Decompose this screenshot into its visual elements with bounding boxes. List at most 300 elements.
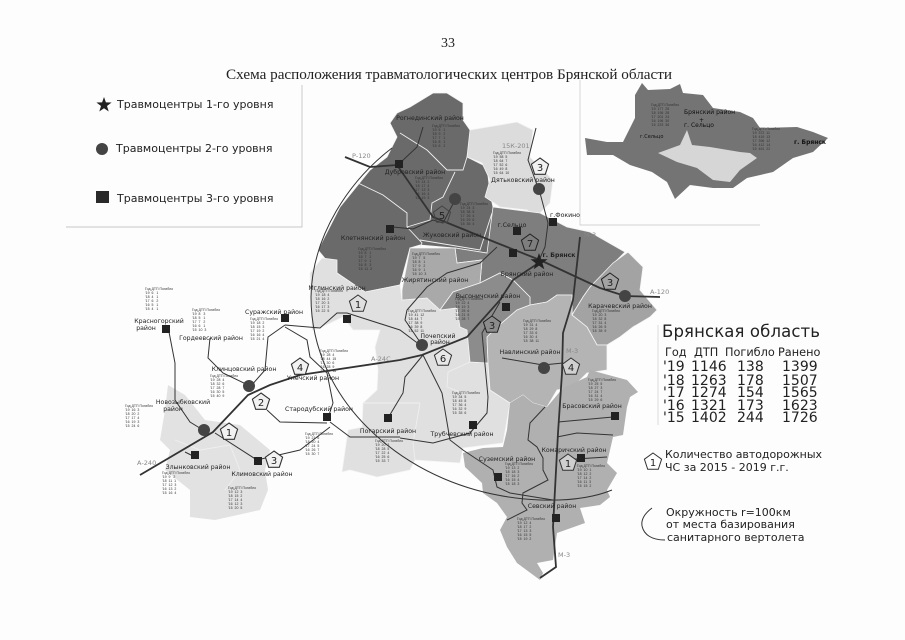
district accident tables (tiny, approximate figures): '15 35 9 (592, 329, 606, 333)
road labels: А-120 (650, 288, 669, 296)
district accident tables (tiny, approximate figures): '16 21 5 (455, 313, 469, 317)
legend: helicopter circle meaning (642, 506, 805, 544)
main road A-240 (140, 262, 540, 475)
region: Zhiryatino district (402, 248, 482, 310)
district accident tables (tiny, approximate figures): '16 31 4 (588, 394, 602, 398)
region: Karachev district (572, 252, 657, 345)
district accident tables (tiny, approximate figures): '15 10 3 (192, 328, 206, 332)
district accident tables (tiny, approximate figures): '19 12 3 (228, 490, 242, 494)
district labels: г.Фокино (550, 212, 580, 219)
table header row: Ранено (778, 346, 820, 359)
district accident tables (tiny, approximate figures): '18 32 6 (210, 382, 224, 386)
district accident tables (tiny, approximate figures): '17 6 2 (145, 299, 158, 303)
district labels: Навлинский район (500, 348, 560, 356)
district accident tables (tiny, approximate figures): '19 18 2 (250, 321, 264, 325)
district labels: Красногорский (134, 317, 184, 325)
district labels: Брянский район (501, 270, 553, 278)
district accident tables (tiny, approximate figures): '19 7 5 (412, 256, 425, 260)
district accident tables (tiny, approximate figures): '15 19 2 (517, 537, 531, 541)
district accident tables (tiny, approximate figures): '16 12 3 (228, 502, 242, 506)
district accident tables (tiny, approximate figures): Год ДТП Погибло (210, 374, 238, 378)
district accident tables (tiny, approximate figures): Год ДТП Погибло (505, 462, 533, 466)
district accident tables (tiny, approximate figures): '15 38 11 (523, 339, 539, 343)
legend text level 2: Травмоцентры 2-го уровня (115, 142, 272, 155)
district accident tables (tiny, approximate figures): Год ДТП Погибло (358, 247, 386, 251)
panel: inset map of Bryansk district (580, 80, 828, 225)
icon: square level 3 (96, 191, 109, 203)
district accident tables (tiny, approximate figures): '15 44 16 (320, 369, 336, 373)
row 2016: '16 (663, 398, 685, 414)
row 2019: 138 (737, 359, 764, 375)
district labels: Клинцовский район (212, 365, 276, 373)
emergency count pentagons: 7 (527, 239, 533, 250)
table header row (665, 346, 820, 359)
district labels: Трубчевский район (429, 430, 494, 438)
district accident tables (tiny, approximate figures): '17 24 7 (588, 390, 602, 394)
inset table: Bryansk city: '16 412 14 (752, 143, 770, 147)
road labels: Р-120 (352, 152, 371, 160)
district labels: Клетнянский район (341, 234, 405, 242)
district accident tables (tiny, approximate figures): '17 26 4 (460, 214, 474, 218)
district accident tables (tiny, approximate figures): '17 12 3 (162, 483, 176, 487)
table heading: Брянская область (662, 322, 820, 341)
district labels: Погарский район (360, 427, 416, 435)
table header row: Погибло (725, 346, 775, 359)
row 2018: 1507 (782, 373, 818, 389)
row 2016: 1321 (691, 398, 727, 414)
district accident tables (tiny, approximate figures): '18 15 3 (250, 325, 264, 329)
row 2017: 154 (737, 385, 764, 401)
district accident tables (tiny, approximate figures): Год ДТП Погибло (192, 308, 220, 312)
district accident tables (tiny, approximate figures): '19 34 5 (452, 395, 466, 399)
district accident tables (tiny, approximate figures): '16 25 6 (375, 455, 389, 459)
district labels: Жуковский район (423, 231, 481, 239)
district accident tables (tiny, approximate figures): Год ДТП Погибло (415, 176, 443, 180)
row 2019: 1146 (691, 359, 727, 375)
district accident tables (tiny, approximate figures): '15 4 1 (145, 307, 158, 311)
district accident tables (tiny, approximate figures): '16 17 3 (315, 305, 329, 309)
district labels: Климовский район (231, 470, 293, 478)
district accident tables (tiny, approximate figures): '16 30 4 (523, 335, 537, 339)
row 2018: 1263 (691, 373, 727, 389)
table header row: Год (665, 346, 687, 359)
row 2015 (663, 410, 818, 426)
district accident tables (tiny, approximate figures): '19 10 1 (577, 468, 591, 472)
district accident tables (tiny, approximate figures): '15 29 6 (588, 398, 602, 402)
district accident tables (tiny, approximate figures): '15 15 2 (577, 484, 591, 488)
district accident tables (tiny, approximate figures): '19 28 4 (320, 353, 334, 357)
district accident tables (tiny, approximate figures): Год ДТП Погибло (517, 517, 545, 521)
main road R-120 (345, 157, 660, 297)
district accident tables (tiny, approximate figures) (125, 124, 620, 541)
inset table: Bryansk district: Год ДТП Погибло (651, 103, 679, 107)
district labels: Севский район (528, 502, 576, 510)
district accident tables (tiny, approximate figures): '17 16 2 (505, 474, 519, 478)
pentagon legend text: Количество автодорожных (665, 448, 822, 461)
district accident tables (tiny, approximate figures): '17 38 9 (408, 321, 422, 325)
district accident tables (tiny, approximate figures): '18 38 5 (460, 210, 474, 214)
region: Vygonichi district (440, 273, 530, 363)
district accident tables (tiny, approximate figures): Год ДТП Погибло (375, 439, 403, 443)
district accident tables (tiny, approximate figures): Год ДТП Погибло (162, 471, 190, 475)
emergency count pentagons: 3 (607, 278, 613, 289)
legend: pentagon meaning (644, 448, 822, 474)
inset labels: г. Сельцо (684, 122, 714, 129)
district accident tables (tiny, approximate figures): '18 8 1 (412, 260, 425, 264)
district accident tables (tiny, approximate figures): Год ДТП Погибло (228, 486, 256, 490)
district labels: Брасовский район (562, 402, 622, 410)
row 2017: 1274 (691, 385, 727, 401)
district accident tables (tiny, approximate figures): Год ДТП Погибло (320, 349, 348, 353)
district accident tables (tiny, approximate figures): '19 8 3 (192, 312, 205, 316)
district accident tables (tiny, approximate figures): '18 20 4 (305, 440, 319, 444)
district accident tables (tiny, approximate figures): '16 30 5 (210, 390, 224, 394)
inset table: Bryansk district: '18 195 28 (651, 111, 669, 115)
district accident tables (tiny, approximate figures): '16 26 7 (305, 448, 319, 452)
district labels: Жирятинский район (402, 276, 468, 284)
main road M-3 (540, 237, 580, 578)
row 2017: 1565 (782, 385, 818, 401)
district accident tables (tiny, approximate figures): Год ДТП Погибло (250, 317, 278, 321)
district labels: Дубровский район (385, 168, 445, 176)
district accident tables (tiny, approximate figures): '15 64 10 (493, 171, 509, 175)
district accident tables (tiny, approximate figures): Год ДТП Погибло (588, 378, 616, 382)
district accident tables (tiny, approximate figures): '16 9 1 (412, 268, 425, 272)
district accident tables (tiny, approximate figures): '17 52 6 (493, 163, 507, 167)
district accident tables (tiny, approximate figures): '18 17 4 (415, 184, 429, 188)
district accident tables (tiny, approximate figures): '17 28 7 (210, 386, 224, 390)
district accident tables (tiny, approximate figures): '19 13 2 (505, 466, 519, 470)
district accident tables (tiny, approximate figures): '15 19 3 (415, 196, 429, 200)
district boundaries (175, 133, 548, 520)
district accident tables (tiny, approximate figures): '19 5 1 (432, 128, 445, 132)
level 1 star: Bryansk (530, 253, 548, 269)
level 2 circles (198, 183, 631, 436)
row 2016 (663, 398, 818, 414)
inset table: Bryansk city: '19 372 11 (752, 131, 770, 135)
row 2016: 173 (737, 398, 764, 414)
district accident tables (tiny, approximate figures): '16 29 6 (460, 218, 474, 222)
district accident tables (tiny, approximate figures): '19 14 2 (415, 180, 429, 184)
district accident tables (tiny, approximate figures): '15 20 5 (228, 506, 242, 510)
district accident tables (tiny, approximate figures): '18 7 2 (358, 255, 371, 259)
inset labels: г. Брянск (794, 139, 826, 146)
district labels: район (163, 405, 183, 413)
row 2019: '19 (663, 359, 685, 375)
district labels (134, 114, 652, 510)
emergency count pentagons: 6 (440, 354, 446, 365)
district accident tables (tiny, approximate figures): '17 36 4 (452, 403, 466, 407)
district accident tables (tiny, approximate figures): '18 5 1 (192, 316, 205, 320)
district accident tables (tiny, approximate figures): '15 28 7 (455, 317, 469, 321)
district accident tables (tiny, approximate figures): '16 6 1 (192, 324, 205, 328)
road labels (137, 142, 669, 559)
district accident tables (tiny, approximate figures): '19 18 4 (315, 293, 329, 297)
district accident tables (tiny, approximate figures): '19 8 1 (358, 251, 371, 255)
district labels: Рогнединский район (396, 114, 464, 122)
district labels: Стародубский район (285, 405, 353, 413)
district accident tables (tiny, approximate figures): '15 30 7 (305, 452, 319, 456)
district accident tables (tiny, approximate figures): '19 20 3 (375, 443, 389, 447)
inset table: Bryansk district: '19 177 25 (651, 107, 669, 111)
district labels: Карачевский район (588, 302, 652, 310)
district accident tables (tiny, approximate figures): '16 8 3 (358, 263, 371, 267)
row 2017 (663, 385, 818, 401)
district accident tables (tiny, approximate figures): '19 41 12 (408, 313, 424, 317)
region: south-west districts Novozybkov, Zlynka, Klimovo (160, 385, 270, 520)
district labels: г.Сельцо (498, 222, 527, 229)
district accident tables (tiny, approximate figures): '16 32 9 (452, 407, 466, 411)
district labels: район (136, 324, 156, 332)
icon: arc (642, 508, 665, 540)
district accident tables (tiny, approximate figures): Год ДТП Погибло (493, 151, 521, 155)
district accident tables (tiny, approximate figures): '16 16 4 (415, 192, 429, 196)
district accident tables (tiny, approximate figures): Год ДТП Погибло (577, 464, 605, 468)
district accident tables (tiny, approximate figures): '18 17 2 (517, 525, 531, 529)
district accident tables (tiny, approximate figures): '19 16 3 (125, 408, 139, 412)
district accident tables (tiny, approximate figures): '18 4 1 (145, 295, 158, 299)
district accident tables (tiny, approximate figures): '17 14 2 (577, 476, 591, 480)
district accident tables (tiny, approximate figures): Год ДТП Погибло (592, 309, 620, 313)
road labels: М-3 (558, 551, 570, 559)
inset table: Bryansk district: '15 223 36 (651, 123, 669, 127)
district accident tables (tiny, approximate figures): '19 12 4 (517, 521, 531, 525)
district labels: Унечский район (287, 374, 339, 382)
region: south districts Suzemka, Sevsk, Komarichi, Brasovo (463, 370, 638, 580)
district accident tables (tiny, approximate figures): Год ДТП Погибло (125, 404, 153, 408)
emergency count pentagons: 4 (297, 363, 303, 374)
row 2015: '15 (663, 410, 685, 426)
district accident tables (tiny, approximate figures): '16 15 4 (505, 478, 519, 482)
district accident tables (tiny, approximate figures): '15 6 2 (432, 144, 445, 148)
district accident tables (tiny, approximate figures): '17 9 2 (412, 264, 425, 268)
district accident tables (tiny, approximate figures): '15 11 2 (358, 267, 372, 271)
district labels: Комаричский район (542, 446, 606, 454)
district accident tables (tiny, approximate figures): '16 26 5 (592, 325, 606, 329)
emergency count pentagons: 2 (258, 398, 264, 409)
district accident tables (tiny, approximate figures): '19 9 2 (162, 475, 175, 479)
inset labels: Брянский район (684, 109, 735, 116)
row 2016: 1623 (782, 398, 818, 414)
legend: helicopter circle meaning: санитарного вертолета (667, 531, 805, 544)
inset labels: + (699, 117, 704, 124)
district accident tables (tiny, approximate figures): '16 39 8 (408, 325, 422, 329)
district labels: Злынковский район (166, 463, 230, 471)
district accident tables (tiny, approximate figures): '17 25 6 (455, 309, 469, 313)
inset labels: г.Сельцо (640, 134, 663, 140)
district accident tables (tiny, approximate figures): '15 40 9 (210, 394, 224, 398)
legend text level 1: Травмоцентры 1-го уровня (116, 98, 273, 111)
panel: Bryansk oblast statistics table (658, 322, 820, 426)
district accident tables (tiny, approximate figures): Год ДТП Погибло (408, 309, 436, 313)
page number: 33 (441, 36, 455, 51)
district labels: Гордеевский район (179, 334, 243, 342)
district accident tables (tiny, approximate figures): '18 27 3 (588, 386, 602, 390)
district accident tables (tiny, approximate figures): '19 31 4 (523, 323, 537, 327)
district accident tables (tiny, approximate figures): '15 35 4 (460, 222, 474, 226)
district accident tables (tiny, approximate figures): '15 16 4 (162, 491, 176, 495)
inset table: Bryansk city: '15 451 22 (752, 147, 770, 151)
district accident tables (tiny, approximate figures): '18 20 2 (125, 412, 139, 416)
trauma centre markers (162, 160, 631, 522)
icon: circle level 2 (96, 143, 108, 155)
icon: pentagon: 1 (650, 458, 656, 469)
district accident tables (tiny, approximate figures): '19 24 3 (460, 206, 474, 210)
inset table: Bryansk district: '17 201 24 (651, 115, 669, 119)
emergency count pentagons: 1 (226, 428, 232, 439)
district labels: район (430, 338, 450, 346)
district accident tables (tiny, approximate figures): '18 18 3 (505, 470, 519, 474)
map of Bryansk oblast (125, 93, 669, 580)
district accident tables (tiny, approximate figures): '18 28 5 (375, 447, 389, 451)
district accident tables (tiny, approximate figures): '17 33 6 (523, 331, 537, 335)
district accident tables (tiny, approximate figures): '17 30 6 (320, 361, 334, 365)
district accident tables (tiny, approximate figures): '18 19 3 (455, 305, 469, 309)
row 2018: 178 (737, 373, 764, 389)
region: Bryansk district (455, 207, 625, 315)
district labels: Выгоничский район (456, 292, 520, 300)
district accident tables (tiny, approximate figures): '17 7 2 (192, 320, 205, 324)
district accident tables (tiny, approximate figures): '18 44 7 (408, 317, 422, 321)
district accident tables (tiny, approximate figures): '19 21 6 (305, 436, 319, 440)
row 2015: 244 (737, 410, 764, 426)
district accident tables (tiny, approximate figures): '15 33 7 (375, 459, 389, 463)
district accident tables (tiny, approximate figures): '18 32 8 (592, 317, 606, 321)
icon: star level 1 (96, 97, 112, 112)
district accident tables (tiny, approximate figures): '17 9 1 (358, 259, 371, 263)
district accident tables (tiny, approximate figures): '18 16 2 (315, 297, 329, 301)
district accident tables (tiny, approximate figures): '16 16 4 (250, 333, 264, 337)
emergency count pentagons: 1 (565, 459, 571, 470)
district accident tables (tiny, approximate figures): Год ДТП Погибло (455, 297, 483, 301)
district accident tables (tiny, approximate figures): '16 13 2 (162, 487, 176, 491)
district accident tables (tiny, approximate figures): '17 24 5 (305, 444, 319, 448)
district accident tables (tiny, approximate figures): '17 14 4 (228, 498, 242, 502)
district accident tables (tiny, approximate figures): '15 22 5 (315, 309, 329, 313)
emergency count pentagons (220, 158, 619, 470)
inset table: Bryansk city: '17 396 12 (752, 139, 770, 143)
district accident tables (tiny, approximate figures): '17 22 4 (375, 451, 389, 455)
district labels: Мглинский район (308, 284, 366, 292)
row 2019: 1399 (782, 359, 818, 375)
emergency count pentagons: 4 (568, 363, 574, 374)
district accident tables (tiny, approximate figures): '18 45 8 (452, 399, 466, 403)
panel: legend of trauma centre levels (66, 85, 302, 227)
district accident tables (tiny, approximate figures): Год ДТП Погибло (452, 391, 480, 395)
district accident tables (tiny, approximate figures): '15 35 6 (452, 411, 466, 415)
level 3 squares (162, 160, 619, 522)
road labels: А-240 (137, 459, 156, 467)
table header row: ДТП (694, 346, 718, 359)
district labels: г. Брянск (542, 252, 576, 259)
district accident tables (tiny, approximate figures): '15 52 11 (408, 329, 424, 333)
district accident tables (tiny, approximate figures): '17 31 4 (592, 321, 606, 325)
district accident tables (tiny, approximate figures): '16 5 1 (145, 303, 158, 307)
icon: pentagon (644, 453, 662, 469)
inset table: Bryansk city: '18 419 13 (752, 135, 770, 139)
district accident tables (tiny, approximate figures): '15 18 3 (505, 482, 519, 486)
district accident tables (tiny, approximate figures): '17 7 1 (432, 136, 445, 140)
district accident tables (tiny, approximate figures): '18 9 2 (432, 132, 445, 136)
district accident tables (tiny, approximate figures): '19 6 1 (145, 291, 158, 295)
district accident tables (tiny, approximate figures): '19 20 3 (592, 313, 606, 317)
district accident tables (tiny, approximate figures): '19 22 4 (455, 301, 469, 305)
emergency count pentagons: 3 (271, 456, 277, 467)
district accident tables (tiny, approximate figures): '18 64 7 (493, 159, 507, 163)
district accident tables (tiny, approximate figures): '19 25 5 (588, 382, 602, 386)
emergency count pentagons: 1 (355, 300, 361, 311)
district accident tables (tiny, approximate figures): '17 13 3 (415, 188, 429, 192)
district accident tables (tiny, approximate figures): '18 11 1 (162, 479, 176, 483)
district accident tables (tiny, approximate figures): '16 8 1 (432, 140, 445, 144)
district accident tables (tiny, approximate figures): Год ДТП Погибло (432, 124, 460, 128)
road labels: М-3 (566, 347, 578, 355)
road labels: М-3 (584, 231, 596, 239)
district labels: Суражский район (245, 308, 303, 316)
district accident tables (tiny, approximate figures): '17 19 2 (250, 329, 264, 333)
emergency count pentagons: 3 (489, 321, 495, 332)
district accident tables (tiny, approximate figures): Год ДТП Погибло (315, 289, 343, 293)
district accident tables (tiny, approximate figures): '18 29 8 (523, 327, 537, 331)
inset district shape (585, 83, 828, 199)
district accident tables (tiny, approximate figures): '18 15 2 (228, 494, 242, 498)
district labels: Суземский район (479, 455, 535, 463)
district accident tables (tiny, approximate figures): Год ДТП Погибло (412, 252, 440, 256)
district accident tables (tiny, approximate figures): '17 17 4 (125, 416, 139, 420)
district accident tables (tiny, approximate figures): '15 24 6 (125, 424, 139, 428)
district accident tables (tiny, approximate figures): '18 12 2 (577, 472, 591, 476)
emergency count pentagons: 3 (537, 163, 543, 174)
row 2018 (663, 373, 818, 389)
row 2017: '17 (663, 385, 685, 401)
region: light central districts Mglin, Pochep, Pogar, Trubchevsk (310, 258, 510, 477)
row 2015: 1726 (782, 410, 818, 426)
inset table: Bryansk district: '16 196 30 (651, 119, 669, 123)
region: Dyatkovo district (467, 122, 567, 227)
district accident tables (tiny, approximate figures): '15 10 3 (412, 272, 426, 276)
road labels: А-24С (371, 355, 391, 363)
district accident tables (tiny, approximate figures): '18 44 15 (320, 357, 336, 361)
legend: pentagon meaning: ЧС за 2015 - 2019 г.г. (665, 461, 789, 474)
helicopter range circle r=100 km (311, 148, 612, 500)
inset labels (640, 109, 826, 146)
circle legend text: Окружность r=100км (666, 506, 791, 519)
district accident tables (tiny, approximate figures): '16 15 5 (517, 533, 531, 537)
emergency count pentagons: 5 (439, 211, 445, 222)
district accident tables (tiny, approximate figures): '16 19 3 (125, 420, 139, 424)
district accident tables (tiny, approximate figures): '15 21 4 (250, 337, 264, 341)
district accident tables (tiny, approximate figures): '16 11 3 (577, 480, 591, 484)
district labels: Новозыбковский (156, 398, 210, 406)
inset table: Bryansk city: Год ДТП Погибло (752, 127, 780, 131)
inset city area (658, 130, 757, 182)
region: Navlya district (487, 295, 607, 407)
row 2015: 1402 (691, 410, 727, 426)
district accident tables (tiny, approximate figures): '16 49 8 (493, 167, 507, 171)
district accident tables (tiny, approximate figures): '19 28 4 (210, 378, 224, 382)
row 2019 (663, 359, 818, 375)
district accident tables (tiny, approximate figures): Год ДТП Погибло (305, 432, 333, 436)
secondary roads (169, 127, 613, 500)
district accident tables (tiny, approximate figures): '19 58 5 (493, 155, 507, 159)
district accident tables (tiny, approximate figures): '17 13 3 (517, 529, 531, 533)
district labels: Почепский (420, 332, 456, 340)
district accident tables (tiny, approximate figures): '17 20 3 (315, 301, 329, 305)
road labels: 15К-201 (502, 142, 530, 150)
title: Схема расположения травматологических центров Брянской области (226, 67, 672, 83)
district labels: Дятьковский район (491, 176, 555, 184)
district accident tables (tiny, approximate figures): Год ДТП Погибло (523, 319, 551, 323)
